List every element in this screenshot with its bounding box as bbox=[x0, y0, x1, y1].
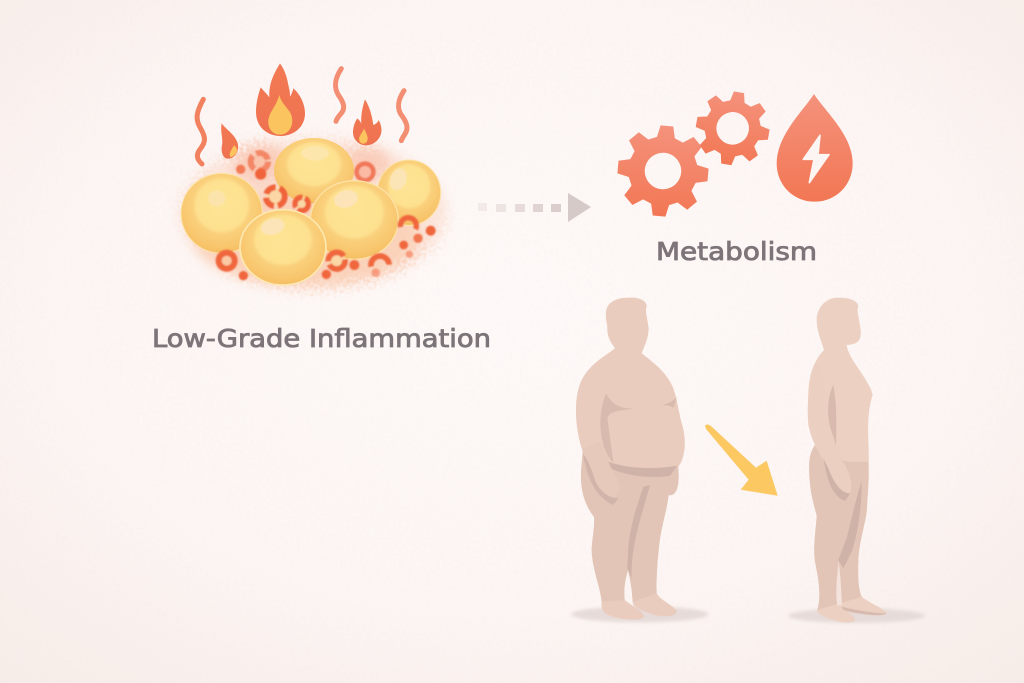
lower body shade bbox=[809, 445, 869, 610]
hand shade bbox=[583, 453, 618, 505]
hand shade bbox=[823, 458, 850, 501]
fat cell: left bbox=[181, 173, 262, 253]
dotted arrow bbox=[478, 193, 591, 222]
lower body shade bbox=[581, 452, 679, 602]
heat wave: left bbox=[197, 99, 204, 164]
arm bbox=[808, 362, 851, 493]
inflammation glow bbox=[180, 138, 447, 288]
fat cell: centre right bbox=[310, 181, 398, 259]
foot shade bbox=[842, 607, 887, 615]
chest crease bbox=[662, 397, 677, 408]
illustration: inflamed fat cells bbox=[180, 63, 447, 288]
illustration: body comparison bbox=[572, 297, 925, 623]
belt crease bbox=[608, 462, 677, 477]
figure: before, larger body bbox=[576, 297, 685, 620]
heat wave: top centre bbox=[335, 69, 344, 121]
figure: after, slim body bbox=[808, 298, 887, 623]
arm crease bbox=[828, 385, 836, 445]
inflammatory cells: lower cluster bbox=[219, 216, 436, 280]
fat cell: right bbox=[377, 160, 441, 225]
label: Low-Grade Inflammation: Low-Grade Inflammation bbox=[152, 324, 491, 353]
label: Metabolism: Metabolism bbox=[656, 237, 817, 266]
leg shade bbox=[627, 485, 650, 578]
icon: right flame bbox=[353, 99, 381, 145]
icon: large gear bbox=[614, 122, 712, 220]
arrow: down to slimmer body bbox=[705, 424, 778, 496]
icon: small gear bbox=[690, 86, 775, 171]
icon: small left flame bbox=[221, 123, 238, 159]
arm bbox=[583, 442, 620, 499]
ground shadow: left figure bbox=[572, 606, 708, 622]
arm crease bbox=[600, 393, 633, 462]
icon: blood drop with lightning bbox=[777, 94, 853, 202]
icons: metabolism gears and drop bbox=[614, 86, 853, 220]
icon: large flame bbox=[256, 63, 305, 136]
fat cell: top centre bbox=[274, 138, 354, 203]
heat wave: right bbox=[398, 91, 407, 141]
leg gap bbox=[836, 562, 842, 606]
ground shadow: right figure bbox=[788, 608, 925, 623]
leg shade bbox=[838, 482, 862, 568]
fat cell: front bbox=[240, 210, 326, 285]
inflammatory cells: middle cluster bbox=[236, 153, 373, 211]
